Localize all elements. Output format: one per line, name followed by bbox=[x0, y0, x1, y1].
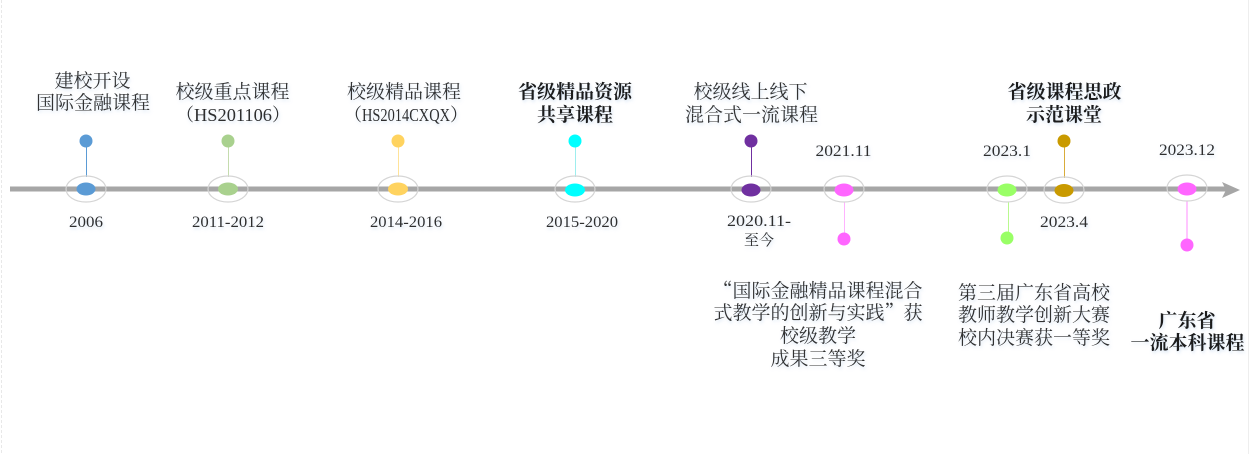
milestone: 2020.11 to present bbox=[685, 77, 818, 250]
milestone: 2015-2020: 省级精品资源 bbox=[518, 77, 633, 104]
timeline axis arrow bbox=[10, 182, 1240, 198]
milestone: 2023.4 bbox=[1007, 77, 1122, 231]
milestone: 2014-2016 bbox=[344, 77, 468, 231]
milestone: 2006: 国际金融课程 bbox=[36, 88, 150, 115]
milestone: 2021.11: 成果三等奖 bbox=[770, 344, 866, 371]
milestone: 2014-2016: （HS2014CXQX） bbox=[344, 105, 468, 125]
milestone: 2021.11: 2021.11 bbox=[816, 143, 872, 160]
milestone: 2023.12: 一流本科课程 bbox=[1130, 328, 1245, 355]
milestone: 2023.12: 2023.12 bbox=[1159, 142, 1215, 159]
milestone: 2014-2016: 2014-2016 bbox=[370, 214, 442, 231]
milestone: 2020.11 to present: 至今 bbox=[744, 229, 774, 250]
milestone: 2020.11 to present: 校级线上线下 bbox=[693, 77, 808, 104]
milestone: 2021.11: “国际金融精品课程混合 bbox=[713, 276, 923, 303]
milestone: 2015-2020: 共享课程 bbox=[537, 100, 613, 127]
milestone: 2023.1: 第三届广东省高校 bbox=[958, 278, 1111, 305]
milestone: 2006 bbox=[36, 66, 150, 231]
milestone: 2011-2012 bbox=[175, 77, 290, 231]
milestone: 2006: 建校开设 bbox=[54, 66, 131, 93]
milestone: 2011-2012: （HS201106） bbox=[176, 105, 290, 125]
milestone: 2014-2016: 校级精品课程 bbox=[347, 77, 461, 104]
milestone: 2015-2020 bbox=[518, 77, 633, 231]
milestone: 2023.1: 2023.1 bbox=[983, 143, 1031, 160]
milestone: 2023.4: 2023.4 bbox=[1040, 214, 1088, 231]
milestone: 2011-2012: 校级重点课程 bbox=[175, 77, 290, 104]
milestone: 2006: 2006 bbox=[69, 214, 103, 231]
milestone: 2020.11 to present: 2020.11- bbox=[727, 213, 791, 230]
milestone: 2023.1 bbox=[958, 143, 1111, 350]
milestone: 2023.4: 示范课堂 bbox=[1026, 100, 1102, 127]
milestone: 2023.12 bbox=[1130, 142, 1245, 355]
milestone: 2020.11 to present: 混合式一流课程 bbox=[685, 100, 818, 127]
milestone: 2015-2020: 2015-2020 bbox=[546, 214, 618, 231]
milestone: 2021.11: 式教学的创新与实践”获 bbox=[713, 298, 923, 325]
milestone: 2021.11: 校级教学 bbox=[780, 321, 856, 348]
milestone: 2023.12: 广东省 bbox=[1158, 306, 1216, 333]
milestone: 2023.1: 校内决赛获一等奖 bbox=[958, 323, 1110, 350]
milestone: 2021.11 bbox=[713, 143, 923, 371]
milestone: 2023.4: 省级课程思政 bbox=[1007, 77, 1122, 104]
milestone: 2011-2012: 2011-2012 bbox=[192, 214, 264, 231]
milestone: 2023.1: 教师教学创新大赛 bbox=[958, 300, 1110, 327]
